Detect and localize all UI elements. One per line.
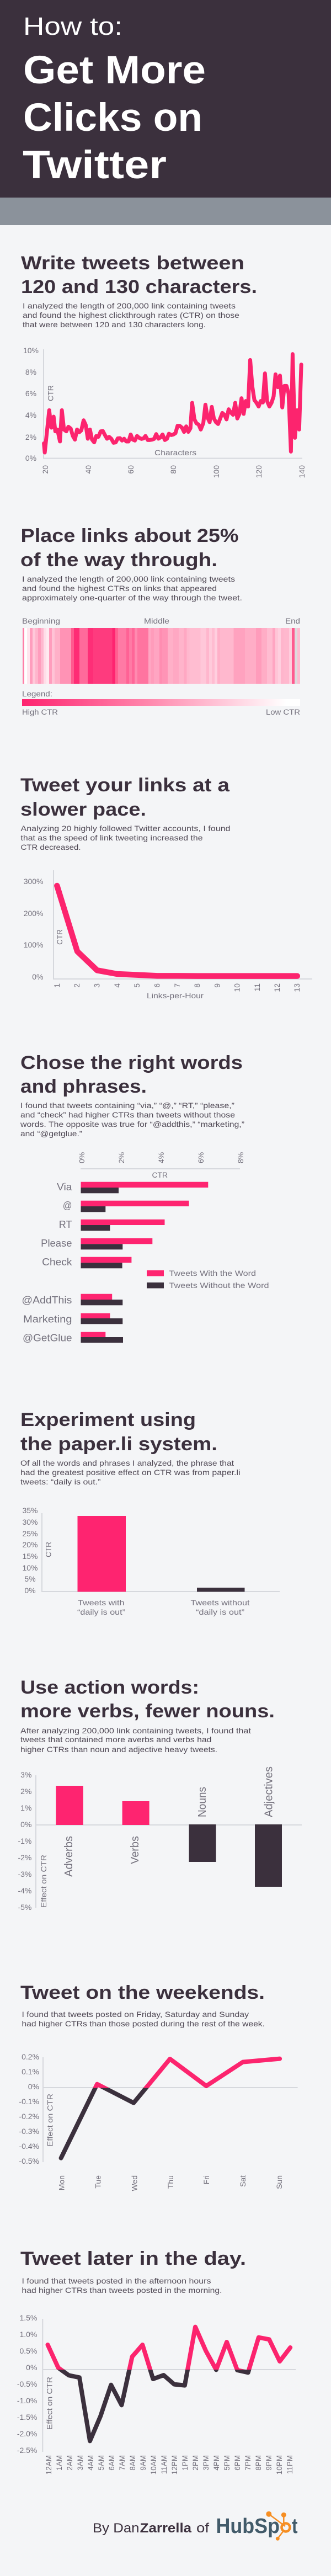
heading xyxy=(20,775,230,820)
legend xyxy=(22,689,300,716)
heading: Use action words: xyxy=(20,1677,199,1698)
icon: HubSpot logo: t xyxy=(292,2515,298,2538)
panel: paper.li xyxy=(20,1409,280,1616)
line chart: CTR by links per hour: 7 xyxy=(173,983,181,988)
panel: tweet pace xyxy=(20,775,312,1000)
bar chart: parts of speech: Effect on CTR xyxy=(39,1855,48,1908)
line chart: effect by hour xyxy=(17,2313,296,2474)
line chart: CTR by links per hour xyxy=(24,870,312,1000)
line chart: CTR by links per hour: 8 xyxy=(193,983,201,988)
line chart: effect by hour: 0% xyxy=(26,2363,37,2372)
line chart: effect by hour: -2.0% xyxy=(17,2429,37,2438)
line chart: effect by hour: 3AM xyxy=(76,2455,84,2471)
text block: tweets that contained more averbs and verbs had xyxy=(20,1735,212,1744)
line chart: effect by hour: 0.5% xyxy=(19,2346,37,2355)
line chart: effect by hour: 11AM xyxy=(160,2455,168,2474)
line chart: effect by hour: 4PM xyxy=(212,2455,221,2471)
line chart: CTR by characters: 10% xyxy=(23,346,39,355)
bar chart: CTR by word: Marketing xyxy=(23,1314,72,1325)
bar chart: CTR by word: 4% xyxy=(157,1152,166,1163)
text block: that were between 120 and 130 characters long. xyxy=(23,320,206,329)
line chart: effect by hour: 6PM xyxy=(233,2455,242,2471)
line chart: CTR by characters: CTR xyxy=(46,385,55,401)
line chart: effect by hour: 11PM xyxy=(286,2455,294,2474)
bar chart: CTR by word: @ xyxy=(63,1200,72,1211)
heading xyxy=(20,525,239,571)
bar chart: daily is out: 15% xyxy=(22,1552,38,1561)
text block: Analyzing 20 highly followed Twitter accounts, I found xyxy=(21,824,231,833)
text block: and “@getglue.” xyxy=(20,1129,82,1138)
line chart: effect by hour: 9PM xyxy=(265,2455,273,2471)
chart legend: Tweets With the Word xyxy=(169,1269,256,1278)
line chart: effect by hour: 1.5% xyxy=(19,2313,37,2322)
byline: Zarrella xyxy=(140,2521,192,2536)
text block: higher CTRs than noun and adjective heavy tweets. xyxy=(20,1745,217,1754)
bar chart: daily is out: “daily is out” xyxy=(77,1608,125,1616)
text block: I analyzed the length of 200,000 link containing tweets xyxy=(23,301,236,310)
text block: After analyzing 200,000 link containing tweets, I found that xyxy=(20,1726,251,1735)
legend: Legend: xyxy=(22,689,52,698)
position labels: Beginning xyxy=(22,616,60,625)
line chart: effect by weekday: Mon xyxy=(57,2175,66,2190)
legend: High CTR xyxy=(22,707,58,716)
text block: words. The opposite was true for “@addthis,” “marketing,” xyxy=(20,1120,244,1129)
bar chart: daily is out: “daily is out” xyxy=(196,1608,244,1616)
text block xyxy=(20,1459,241,1486)
line chart: CTR by characters: 2% xyxy=(25,433,36,441)
line chart: effect by weekday: Thu xyxy=(166,2175,175,2189)
line chart: CTR by characters: 4% xyxy=(25,411,36,419)
panel: link placement xyxy=(20,525,300,716)
title: How to: xyxy=(23,12,122,40)
line chart: CTR by characters: 0% xyxy=(25,454,36,462)
text block: approximately one-quarter of the way through the tweet. xyxy=(22,593,242,602)
panel: weekends xyxy=(19,1982,298,2191)
text block: I found that tweets containing “via,” “@,” “RT,” “please,” xyxy=(20,1101,234,1110)
text block xyxy=(20,1726,251,1754)
bar chart: parts of speech xyxy=(18,1766,302,1912)
bar chart: CTR by word: 8% xyxy=(236,1152,245,1163)
bar chart: daily is out: 0% xyxy=(24,1586,36,1595)
text block xyxy=(20,1101,244,1138)
bar chart: parts of speech: -3% xyxy=(18,1870,31,1878)
bar chart: daily is out: 25% xyxy=(22,1529,38,1538)
line chart: effect by hour: 8AM xyxy=(129,2455,137,2471)
line chart: effect by weekday: Sat xyxy=(238,2175,247,2187)
bar chart: parts of speech: Verbs xyxy=(129,1836,141,1864)
header panel xyxy=(0,0,331,225)
chart legend xyxy=(147,1269,269,1290)
icon: HubSpot logo xyxy=(216,2511,298,2541)
text block: had the greatest positive effect on CTR was from paper.li xyxy=(20,1468,241,1477)
text block: CTR decreased. xyxy=(21,843,81,851)
bar chart: daily is out: 10% xyxy=(22,1563,38,1572)
heading xyxy=(21,253,257,297)
line chart: CTR by characters: 140 xyxy=(297,465,306,478)
line chart: effect by hour: 10AM xyxy=(150,2455,158,2474)
title: Get More xyxy=(23,49,206,92)
heading: Place links about 25% xyxy=(21,525,239,546)
bar chart: parts of speech: 1% xyxy=(20,1803,31,1812)
line chart: CTR by characters xyxy=(23,346,306,478)
line chart: CTR by links per hour: 12 xyxy=(273,983,281,992)
text block xyxy=(22,574,242,602)
line chart: effect by weekday: Effect on CTR xyxy=(46,2094,55,2147)
line chart: effect by hour: 1AM xyxy=(55,2455,63,2471)
line chart: effect by hour: 12AM xyxy=(45,2455,53,2474)
heading: Tweet your links at a xyxy=(20,775,230,796)
byline: By Dan xyxy=(93,2521,139,2536)
line chart: effect by weekday: -0.2% xyxy=(19,2112,39,2121)
heading: Chose the right words xyxy=(20,1052,243,1073)
title xyxy=(23,12,206,187)
line chart: CTR by characters: 80 xyxy=(169,465,178,474)
bar chart: daily is out: 20% xyxy=(22,1540,38,1549)
bar chart: parts of speech: 3% xyxy=(20,1770,31,1779)
text block: I analyzed the length of 200,000 link containing tweets xyxy=(22,574,235,583)
byline xyxy=(93,2521,209,2536)
heading xyxy=(20,1677,275,1722)
line chart: CTR by links per hour: Links-per-Hour xyxy=(147,991,204,1000)
line chart: effect by hour: 1PM xyxy=(181,2455,189,2471)
text block xyxy=(22,2010,265,2028)
line chart: effect by hour: 12PM xyxy=(170,2455,179,2474)
bar chart: daily is out: 30% xyxy=(22,1518,38,1526)
bar chart: parts of speech: -2% xyxy=(18,1853,31,1862)
line chart: CTR by characters: 40 xyxy=(84,465,93,474)
heading xyxy=(20,1052,243,1097)
line chart: effect by weekday: 0.2% xyxy=(22,2052,39,2061)
line chart: effect by hour: 7AM xyxy=(118,2455,126,2471)
heading: Tweet later in the day. xyxy=(20,2248,246,2269)
heading: 120 and 130 characters. xyxy=(21,276,257,297)
line chart: CTR by links per hour: 2 xyxy=(72,983,81,988)
line chart: effect by weekday: -0.1% xyxy=(19,2097,39,2106)
line chart: effect by weekday xyxy=(19,2052,298,2191)
legend: Low CTR xyxy=(266,707,300,716)
heatmap bar xyxy=(23,628,300,684)
bar chart: parts of speech: 0% xyxy=(20,1820,31,1829)
position labels: End xyxy=(285,616,300,625)
line chart: effect by weekday: Sun xyxy=(275,2175,284,2189)
bar chart: daily is out: Tweets with xyxy=(78,1598,125,1607)
line chart: CTR by characters: 60 xyxy=(126,465,135,474)
title: Clicks on xyxy=(23,96,202,140)
bar chart: CTR by word: RT xyxy=(59,1219,72,1230)
line chart: CTR by links per hour: 100% xyxy=(24,940,43,949)
bar chart: parts of speech: Adjectives xyxy=(263,1766,275,1817)
text block: tweets: “daily is out.” xyxy=(20,1477,101,1486)
line chart: CTR by characters: 100 xyxy=(212,465,221,478)
line chart: CTR by links per hour: 13 xyxy=(292,983,301,992)
text block xyxy=(23,301,239,329)
text block: I found that tweets posted in the afternoon hours xyxy=(22,2276,211,2285)
line chart: effect by weekday: -0.4% xyxy=(19,2142,39,2151)
text block: and “check” had higher CTRs than tweets without those xyxy=(20,1110,235,1119)
text block: and found the highest clickthrough rates (CTR) on those xyxy=(23,311,239,320)
line chart: CTR by characters: 8% xyxy=(25,368,36,376)
text block: had higher CTRs than those posted during the rest of the week. xyxy=(22,2019,265,2028)
bar chart: parts of speech: Nouns xyxy=(196,1787,209,1817)
line chart: CTR by links per hour: 1 xyxy=(52,983,61,988)
line chart: effect by hour: 8PM xyxy=(254,2455,263,2471)
heading xyxy=(20,1409,217,1455)
bar chart: parts of speech: 2% xyxy=(20,1787,31,1796)
panel: action words xyxy=(18,1677,302,1912)
bar chart: CTR by word: CTR xyxy=(152,1170,168,1179)
bar chart: CTR by word: @GetGlue xyxy=(23,1333,72,1344)
panel: tweet length xyxy=(21,253,306,478)
bar chart: CTR by word: Check xyxy=(42,1257,73,1268)
line chart: CTR by links per hour: 5 xyxy=(132,983,141,988)
line chart: CTR by characters: Characters xyxy=(154,448,196,457)
line chart: effect by hour: -1.5% xyxy=(17,2413,37,2421)
line chart: effect by hour: Effect on CTR xyxy=(45,2377,54,2430)
bar chart: parts of speech: -1% xyxy=(18,1837,31,1845)
text block xyxy=(21,824,231,851)
position labels xyxy=(22,616,300,625)
text block: and found the highest CTRs on links that appeared xyxy=(22,584,217,593)
text block xyxy=(22,2276,222,2295)
bar chart: CTR by word: Please xyxy=(41,1238,72,1249)
line chart: CTR by links per hour: 3 xyxy=(93,983,102,988)
line chart: effect by weekday: -0.5% xyxy=(19,2157,39,2165)
line chart: CTR by links per hour: CTR xyxy=(55,929,64,945)
bar chart: CTR by word: 2% xyxy=(117,1152,126,1163)
text block: Of all the words and phrases I analyzed, the phrase that xyxy=(20,1459,234,1467)
chart legend: Tweets Without the Word xyxy=(169,1281,269,1290)
line chart: effect by weekday: Wed xyxy=(130,2175,139,2191)
line chart: CTR by links per hour: 9 xyxy=(213,983,222,988)
bar chart: CTR by word: 0% xyxy=(77,1152,86,1163)
bar chart: parts of speech: Adverbs xyxy=(63,1836,75,1877)
line chart: CTR by links per hour: 11 xyxy=(253,983,261,992)
bar chart: CTR by word xyxy=(22,1152,269,1344)
line chart: CTR by links per hour: 4 xyxy=(113,983,121,988)
line chart: effect by hour: 5AM xyxy=(97,2455,105,2471)
title: Twitter xyxy=(23,143,167,187)
heading: and phrases. xyxy=(20,1076,147,1097)
line chart: effect by hour: 2PM xyxy=(191,2455,200,2471)
line chart: effect by weekday: Tue xyxy=(94,2175,103,2189)
heading: Experiment using xyxy=(20,1409,196,1430)
line chart: effect by hour: 10PM xyxy=(275,2455,284,2474)
line chart: effect by hour: -1.0% xyxy=(17,2396,37,2405)
bar chart: CTR by word: @AddThis xyxy=(22,1295,72,1306)
bar chart: daily is out: 35% xyxy=(22,1506,38,1515)
bar chart: daily is out: 5% xyxy=(24,1574,36,1583)
line chart: effect by hour: -2.5% xyxy=(17,2446,37,2455)
bar chart: CTR by word: Via xyxy=(57,1181,73,1193)
text block: that as the speed of link tweeting increased the xyxy=(21,833,203,842)
line chart: effect by weekday: 0.1% xyxy=(22,2067,39,2076)
line chart: CTR by links per hour: 6 xyxy=(152,983,161,988)
line chart: effect by hour: 7PM xyxy=(244,2455,252,2471)
line chart: effect by hour: 9AM xyxy=(139,2455,147,2471)
bar chart: parts of speech: -4% xyxy=(18,1886,31,1895)
icon: HubSpot logo: HubSp xyxy=(216,2515,280,2538)
bar chart: daily is out: CTR xyxy=(44,1542,53,1557)
line chart: CTR by characters: 6% xyxy=(25,389,36,398)
line chart: effect by hour: 2AM xyxy=(66,2455,74,2471)
heading: the paper.li system. xyxy=(20,1434,217,1455)
line chart: effect by weekday: -0.3% xyxy=(19,2127,39,2136)
line chart: CTR by links per hour: 0% xyxy=(32,972,43,981)
line chart: effect by hour: 3PM xyxy=(202,2455,210,2471)
line chart: effect by hour: 4AM xyxy=(87,2455,95,2471)
bar chart: daily is out xyxy=(22,1506,280,1616)
text block: had higher CTRs than tweets posted in the morning. xyxy=(22,2286,222,2295)
bar chart: CTR by word: 6% xyxy=(196,1152,205,1163)
bar chart: daily is out: Tweets without xyxy=(191,1598,250,1607)
line chart: CTR by characters: 20 xyxy=(41,465,50,474)
line chart: CTR by links per hour: 10 xyxy=(233,983,242,992)
line chart: effect by weekday: Fri xyxy=(202,2175,211,2184)
heading: of the way through. xyxy=(20,550,217,571)
heading: Write tweets between xyxy=(21,253,244,274)
position labels: Middle xyxy=(144,616,169,625)
footer credit xyxy=(93,2511,298,2541)
byline: of xyxy=(196,2521,209,2536)
line chart: CTR by characters: 120 xyxy=(254,465,263,478)
line chart: effect by hour: 6AM xyxy=(108,2455,116,2471)
text block: I found that tweets posted on Friday, Saturday and Sunday xyxy=(22,2010,249,2019)
panel: time of day xyxy=(17,2248,296,2474)
bar chart: parts of speech: -5% xyxy=(18,1903,31,1912)
line chart: CTR by links per hour: 200% xyxy=(24,909,43,918)
line chart: effect by hour: -0.5% xyxy=(17,2380,37,2388)
line chart: effect by weekday: 0% xyxy=(28,2082,39,2091)
line chart: effect by hour: 5PM xyxy=(223,2455,231,2471)
line chart: CTR by links per hour: 300% xyxy=(24,877,43,886)
heading: slower pace. xyxy=(20,799,146,820)
panel: words and phrases xyxy=(20,1052,269,1344)
heading: Tweet on the weekends. xyxy=(20,1982,265,2003)
heading: more verbs, fewer nouns. xyxy=(20,1701,275,1722)
line chart: effect by hour: 1.0% xyxy=(19,2330,37,2339)
